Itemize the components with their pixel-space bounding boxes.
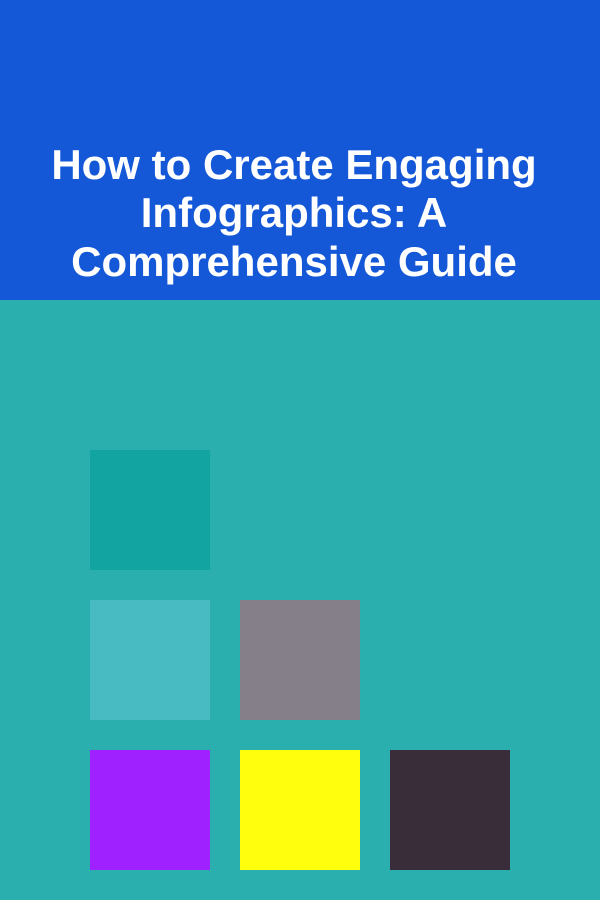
title	[51, 141, 537, 285]
square: purple	[90, 750, 210, 870]
panel: square grid	[90, 450, 510, 870]
square: dark	[390, 750, 510, 870]
square: light teal	[90, 600, 210, 720]
square: yellow	[240, 750, 360, 870]
title: Infographics: A	[141, 189, 447, 236]
title: How to Create Engaging	[51, 141, 537, 188]
square: dark teal	[90, 450, 210, 570]
square: grey	[240, 600, 360, 720]
title: Comprehensive Guide	[71, 238, 517, 285]
header band	[0, 0, 600, 300]
